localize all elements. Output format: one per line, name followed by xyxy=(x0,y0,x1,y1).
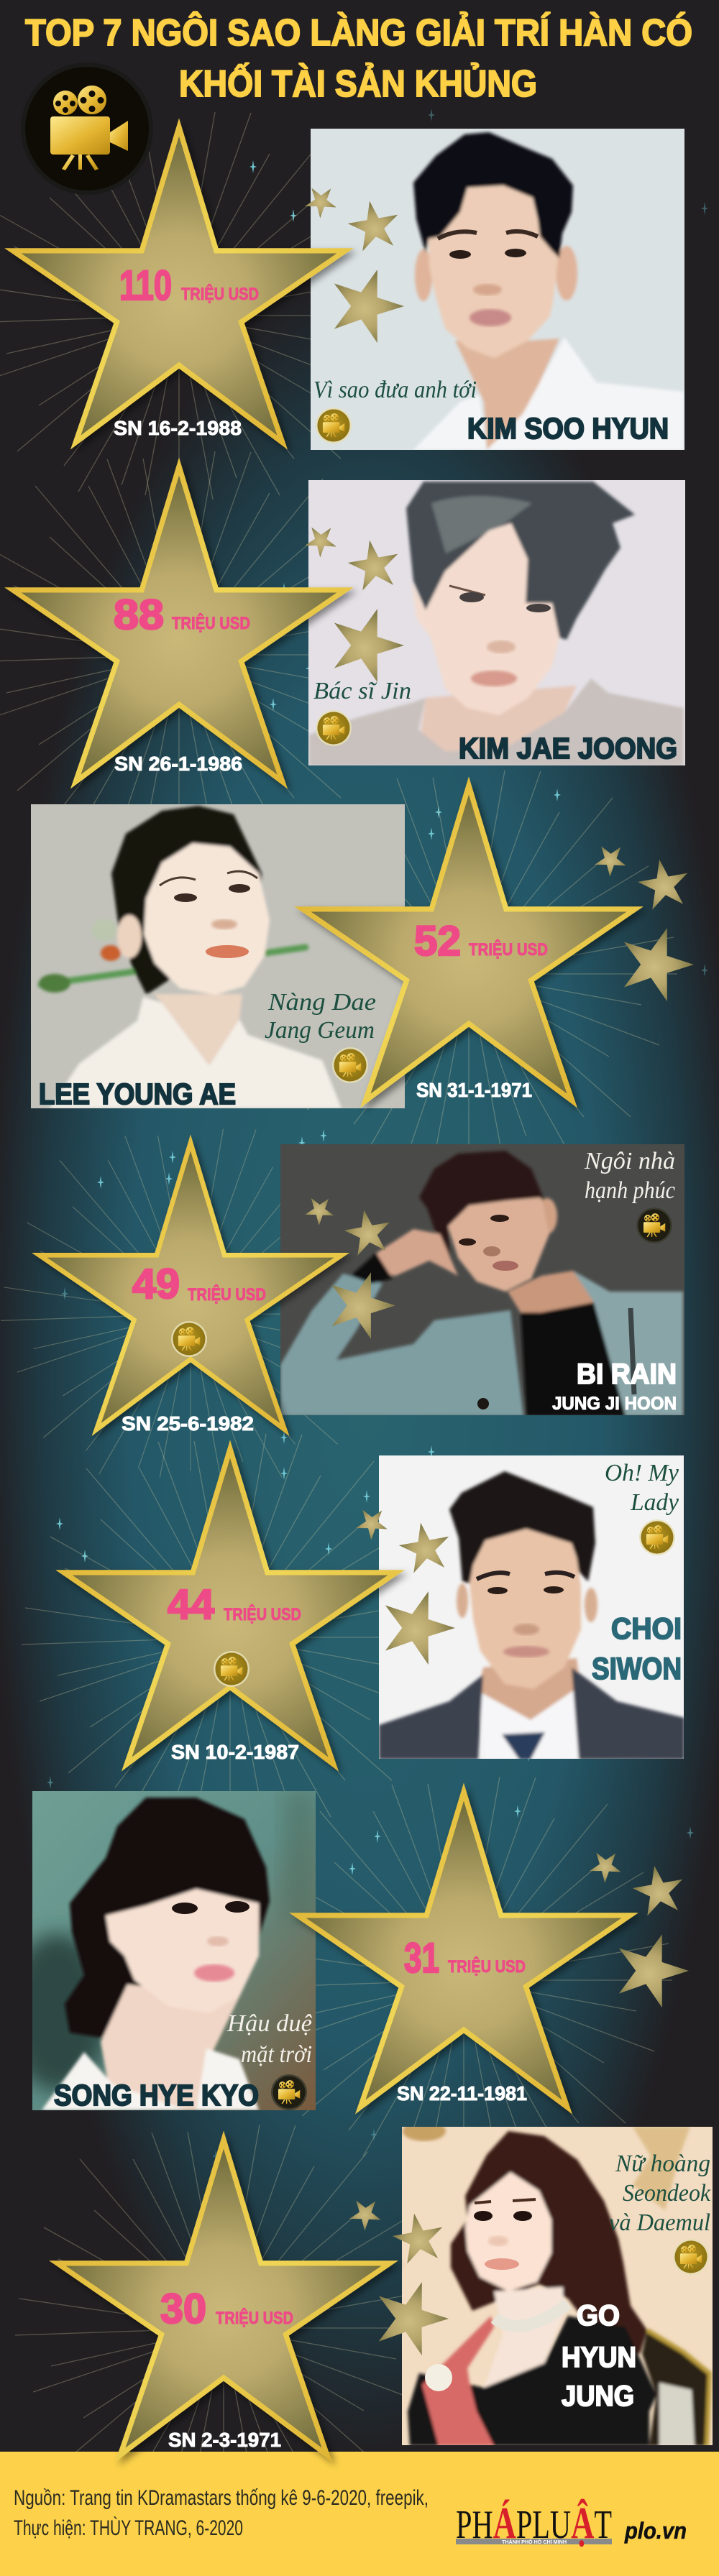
photo: Kim Soo Hyun xyxy=(311,129,684,450)
film title: Jang Geum xyxy=(265,1017,375,1044)
amount: 88: 88 xyxy=(114,592,164,638)
name: SONG HYE KYO xyxy=(54,2079,259,2112)
birth date: SN 16-2-1988 xyxy=(114,417,242,439)
unit: TRIỆU USD xyxy=(181,284,259,304)
unit: TRIỆU USD xyxy=(216,2308,293,2328)
amount: 49: 49 xyxy=(132,1261,180,1307)
name: SIWON xyxy=(592,1652,682,1686)
icon: coin xyxy=(214,1651,249,1687)
footer band xyxy=(0,2452,719,2576)
icon: coin xyxy=(316,408,352,443)
film title xyxy=(226,2010,313,2068)
panel: Kim Jae Joong xyxy=(13,466,677,782)
star: 44 million xyxy=(64,1449,463,1765)
film title: Nữ hoàng xyxy=(615,2150,710,2177)
icon: coin dark xyxy=(636,1208,672,1243)
unit: TRIỆU USD xyxy=(188,1284,266,1305)
logo: Pháp Luật: THÀNH PHỐ HỒ CHÍ MINH xyxy=(502,2538,567,2545)
panel: Go Hyun Jung xyxy=(58,2140,711,2455)
unit: TRIỆU USD xyxy=(469,939,548,960)
birth date: SN 25-6-1982 xyxy=(122,1412,254,1435)
film title: Ngôi nhà xyxy=(584,1148,675,1174)
source credit xyxy=(14,2486,429,2540)
logo: Pháp Luật: PHÁPLUẬT xyxy=(456,2499,612,2548)
film title xyxy=(609,2150,711,2236)
icon: coin xyxy=(332,1047,368,1083)
unit: TRIỆU USD xyxy=(172,613,250,633)
name: HYUN xyxy=(562,2342,636,2373)
icon: coin dark xyxy=(271,2074,307,2110)
logo: plo.vn: plo.vn xyxy=(624,2518,687,2544)
star: 52 million xyxy=(303,786,702,1101)
film title: Nàng Dae xyxy=(267,989,376,1016)
name xyxy=(552,1358,677,1414)
birth date: SN 31-1-1971 xyxy=(416,1079,532,1101)
icon: coin xyxy=(639,1519,675,1555)
panel: Lee Young Ae xyxy=(39,786,702,1110)
star: 49 million xyxy=(40,1143,403,1430)
birth date: SN 10-2-1987 xyxy=(171,1741,299,1763)
star: 110 million xyxy=(13,127,412,443)
panel: Choi Siwon xyxy=(64,1449,682,1765)
title xyxy=(25,12,692,105)
name xyxy=(592,1611,682,1686)
photo: Choi Siwon xyxy=(379,1455,684,1760)
film title xyxy=(265,989,376,1044)
amount: 30: 30 xyxy=(160,2286,206,2332)
photo: Go Hyun Jung xyxy=(402,2121,713,2446)
unit: TRIỆU USD xyxy=(224,1604,301,1624)
icon: coin xyxy=(673,2239,709,2275)
panel: Kim Soo Hyun xyxy=(13,127,669,445)
source credit: Nguồn: Trang tin KDramastars thống kê 9-6-2020, freepik, xyxy=(14,2486,429,2510)
star: 30 million xyxy=(58,2140,457,2455)
film title xyxy=(605,1460,679,1516)
name xyxy=(562,2300,636,2412)
icon: coin xyxy=(316,710,352,746)
icon: film camera badge xyxy=(21,63,153,195)
photo: Song Hye Kyo xyxy=(7,1791,316,2110)
photo: Lee Young Ae xyxy=(31,804,405,1108)
film title: Bác sĩ Jin xyxy=(313,678,411,704)
panel: Bi Rain xyxy=(40,1143,677,1435)
name: KIM SOO HYUN xyxy=(467,412,669,445)
amount: 31: 31 xyxy=(404,1935,439,1982)
birth date: SN 2-3-1971 xyxy=(168,2429,281,2451)
panel: Song Hye Kyo xyxy=(54,1792,697,2112)
photo: Bi Rain xyxy=(280,1144,684,1416)
birth date: SN 22-11-1981 xyxy=(397,2082,527,2104)
name: LEE YOUNG AE xyxy=(39,1077,236,1110)
icon: coin xyxy=(171,1321,207,1357)
name: JUNG xyxy=(562,2380,634,2412)
name: KIM JAE JOONG xyxy=(459,732,677,765)
film title: Vì sao đưa anh tới xyxy=(313,377,477,403)
film title: Oh! My xyxy=(605,1460,679,1486)
film title: Lady xyxy=(630,1489,679,1516)
film title xyxy=(584,1148,675,1204)
title: KHỐI TÀI SẢN KHỦNG xyxy=(179,63,537,105)
unit: TRIỆU USD xyxy=(448,1956,526,1977)
amount: 110: 110 xyxy=(119,262,172,309)
photo: Kim Jae Joong xyxy=(308,480,685,766)
name: CHOI xyxy=(611,1611,682,1645)
film title: hạnh phúc xyxy=(585,1177,675,1204)
birth date: SN 26-1-1986 xyxy=(114,753,242,775)
film title: và Daemul xyxy=(609,2209,710,2236)
amount: 44: 44 xyxy=(168,1581,214,1628)
source credit: Thực hiện: THÙY TRANG, 6-2020 xyxy=(14,2516,243,2540)
name: BI RAIN xyxy=(577,1358,677,1390)
film title: Hậu duệ xyxy=(226,2010,313,2037)
star: 88 million xyxy=(13,466,412,782)
name: GO xyxy=(577,2300,620,2332)
amount: 52: 52 xyxy=(414,918,461,965)
name: JUNG JI HOON xyxy=(552,1394,677,1414)
film title: mặt trời xyxy=(241,2041,312,2068)
film title: Seondeok xyxy=(623,2180,711,2207)
star: 31 million xyxy=(298,1792,697,2107)
